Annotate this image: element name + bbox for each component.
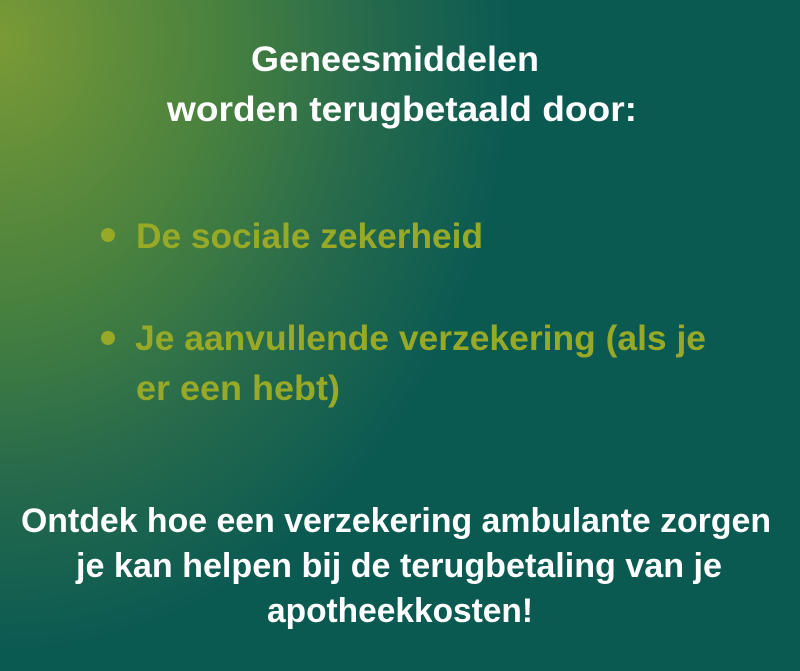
bullet: sociale zekerheid: De sociale zekerheid [136, 217, 483, 256]
call to action text: Ontdek hoe een verzekering ambulante zorgen [21, 502, 771, 540]
bullet: aanvullende verzekering [101, 319, 706, 408]
bullet: aanvullende verzekering: er een hebt) [136, 369, 340, 408]
heading: Geneesmiddelen [251, 40, 539, 79]
heading: worden terugbetaald door: [166, 90, 637, 129]
call to action text: je kan helpen bij de terugbetaling van je [75, 547, 722, 585]
heading [166, 40, 637, 129]
call to action text [21, 502, 771, 630]
bullet: aanvullende verzekering: Je aanvullende verzekering (als je [135, 319, 706, 358]
bullet list [101, 217, 706, 408]
call to action text: apotheekkosten! [267, 592, 533, 630]
